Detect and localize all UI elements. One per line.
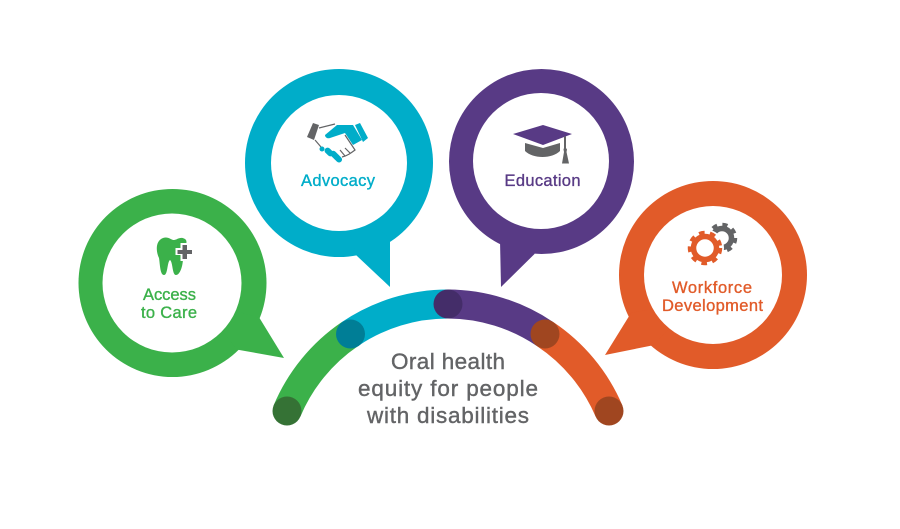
label: access to care: to Care xyxy=(141,304,197,322)
arc segment: green xyxy=(287,334,350,411)
heading: central text: Oral health xyxy=(391,349,505,374)
label: workforce development: Development xyxy=(662,297,763,315)
node: green end xyxy=(272,396,302,426)
panel: access to care bubble xyxy=(78,189,284,377)
heading: central text: equity for people xyxy=(358,376,538,401)
icon: handshake xyxy=(307,123,368,164)
icon: graduation cap xyxy=(513,125,572,164)
purple speech bubble xyxy=(449,69,634,287)
panel: advocacy bubble xyxy=(245,69,433,287)
green speech bubble xyxy=(78,189,284,377)
arc segment: purple xyxy=(448,304,545,334)
icon: tooth with plus xyxy=(157,237,194,275)
label: workforce development xyxy=(662,279,763,315)
heading: central text xyxy=(358,349,538,428)
label: education: Education xyxy=(504,172,580,190)
label: access to care: Access xyxy=(143,286,196,304)
icon: gears xyxy=(686,225,735,267)
heading: central text: with disabilities xyxy=(366,403,529,428)
panel: education bubble xyxy=(449,69,634,287)
arc segment: orange xyxy=(545,334,609,411)
label: advocacy: Advocacy xyxy=(301,172,376,190)
chart: rainbow arc with nodes xyxy=(272,290,624,426)
node: orange end xyxy=(594,396,624,426)
label: workforce development: Workforce xyxy=(672,279,752,297)
node: orange xyxy=(530,320,560,348)
node: blue xyxy=(336,320,365,348)
blue speech bubble xyxy=(245,69,433,287)
orange speech bubble xyxy=(605,181,807,369)
label: access to care xyxy=(141,286,197,322)
arc segment: blue xyxy=(350,304,448,334)
node: purple xyxy=(434,290,462,318)
panel: workforce development bubble xyxy=(605,181,807,369)
